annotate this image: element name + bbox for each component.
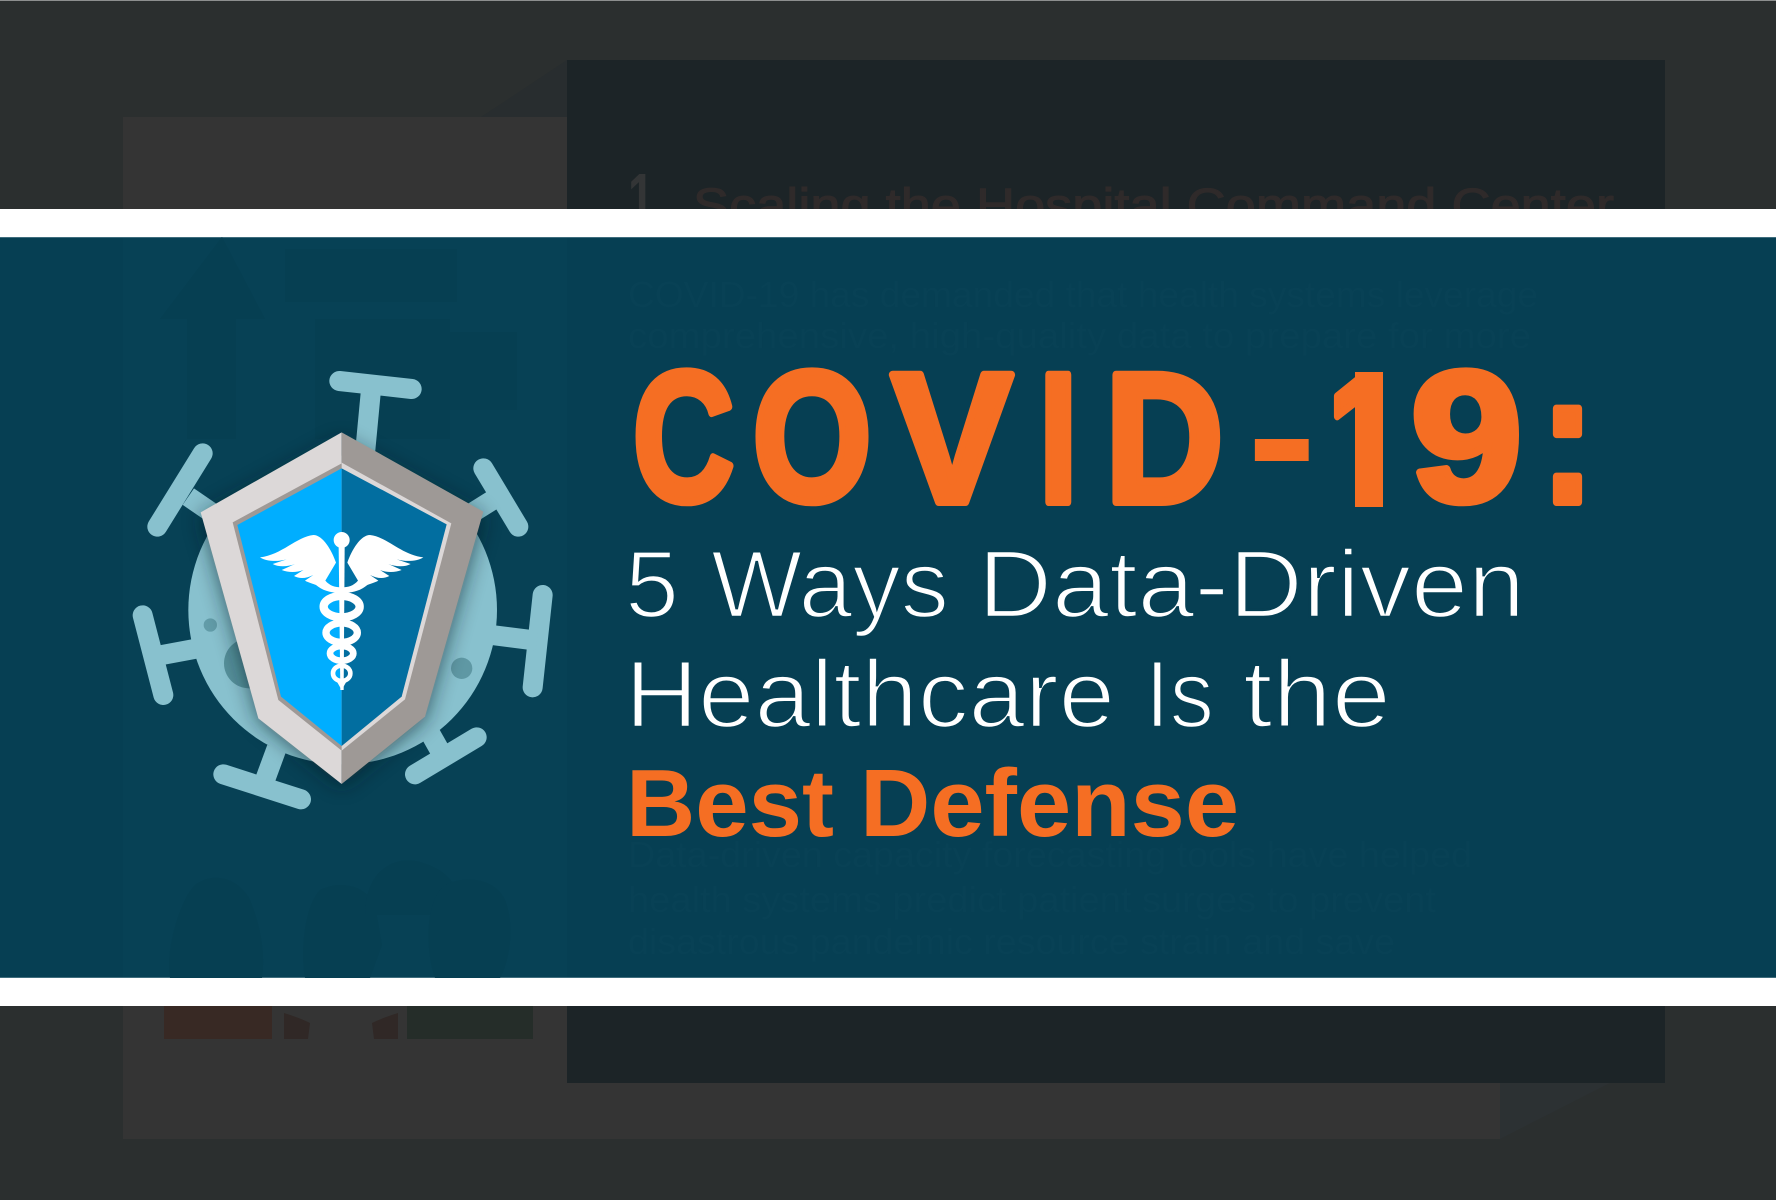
- title: COVID-19: [636, 367, 1582, 507]
- ghost body text: lower: disastrous pandemic resource strain and save: [628, 921, 1395, 962]
- title: COVID-19: C: [633, 333, 734, 540]
- white band top: [0, 209, 1776, 237]
- shield blue faces: [237, 468, 447, 746]
- subtitle line 3: Best Defense: Defense: [860, 750, 1239, 857]
- subtitle line 1: Ways: [711, 531, 949, 638]
- subtitle line 3: Best Defense: Best: [626, 750, 834, 857]
- subtitle line 1: Data-Driven: [978, 531, 1525, 638]
- title: COVID-19: 1: [1327, 336, 1409, 543]
- title: COVID-19: :: [1541, 335, 1594, 542]
- dimmed section heading: [631, 174, 1614, 209]
- caduceus symbol: [260, 532, 423, 690]
- title: COVID-19: -: [1247, 331, 1317, 538]
- ghost body text: upper: [628, 274, 1538, 356]
- subtitle line 2: Is: [1145, 641, 1214, 748]
- ghost body text: lower: health systems predict patient surges to prevent: [628, 879, 1436, 920]
- title: COVID-19: D: [1105, 336, 1224, 542]
- ghost body text: lower: Data-driven capacity forecasting tools have helped: [628, 834, 1472, 875]
- title: COVID-19: O: [752, 333, 872, 540]
- shield frame: [201, 432, 483, 784]
- dimmed section heading: Scaling the Hospital Command Center: [693, 180, 1614, 233]
- subtitle line 2: [625, 641, 1391, 748]
- ghost body text: upper: comprehensive, high-quality data to prepare for more: [628, 315, 1531, 356]
- virus spots: [204, 618, 472, 688]
- subtitle line 2: Healthcare: [625, 641, 1115, 748]
- subtitle line 1: 5: [625, 531, 679, 638]
- ghost body text: lower: [628, 834, 1472, 962]
- ghost illustration: people: [169, 860, 510, 978]
- white band bottom: [0, 978, 1776, 1006]
- teal banner panel: [0, 237, 1776, 978]
- title: COVID-19: I: [1039, 335, 1078, 542]
- icon: virus with shield and caduceus: [143, 381, 543, 799]
- title: COVID-19: V: [892, 334, 1012, 541]
- dimmed section heading: 1: [628, 159, 654, 237]
- title: COVID-19: 9: [1411, 333, 1522, 540]
- subtitle line 2: the: [1243, 641, 1391, 748]
- subtitle line 3: Best Defense: [626, 750, 1239, 857]
- ghost illustration: hospital: [160, 237, 517, 439]
- subtitle line 1: [625, 531, 1525, 638]
- shield shadow: [201, 440, 483, 787]
- ghost body text: upper: COVID-19 has demanded that health systems leverage: [628, 274, 1538, 315]
- virus body and spikes: [143, 381, 543, 799]
